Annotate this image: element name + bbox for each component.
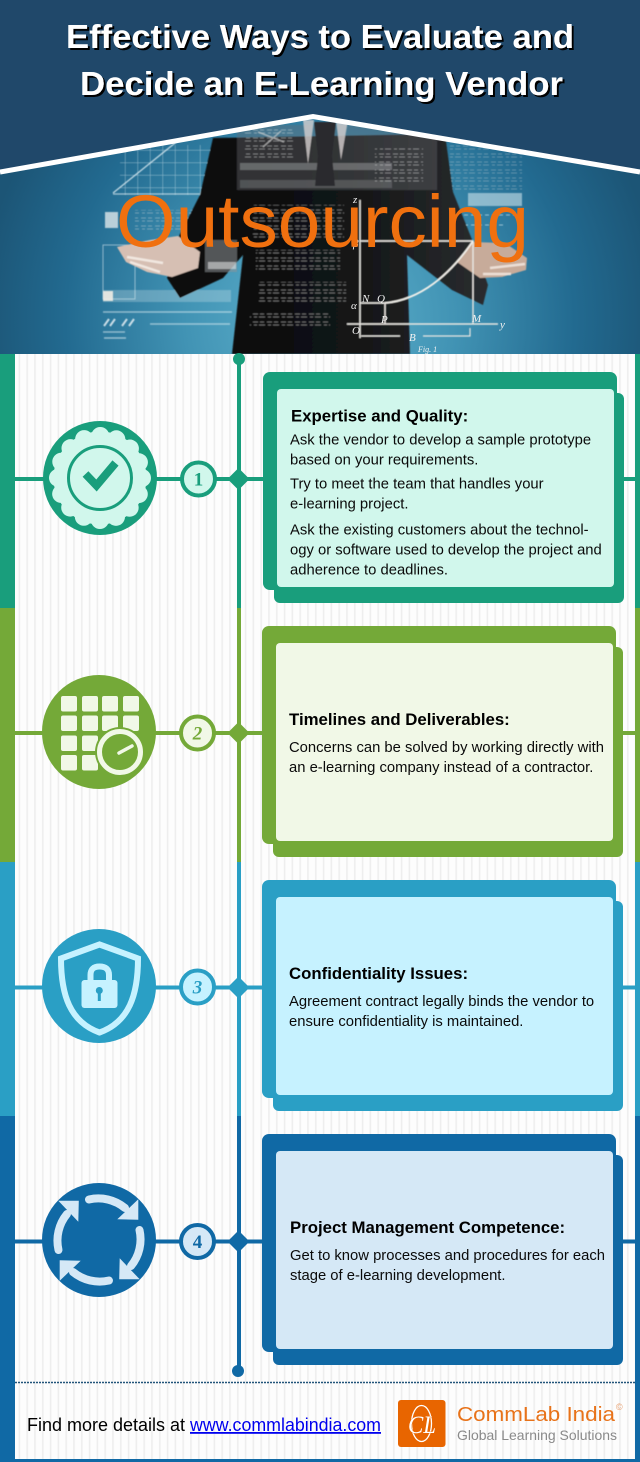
graph labels: B — [409, 332, 416, 344]
card: timelines and deliverables — [262, 626, 623, 857]
card text: ensure confidentiality is maintained. — [289, 1014, 523, 1030]
logo: CommLab India — [398, 1400, 623, 1447]
footer call to action: www.commlabindia.com — [189, 1415, 381, 1435]
roof line — [0, 116, 640, 172]
title — [66, 19, 574, 103]
graph labels: α — [351, 300, 357, 312]
graph labels: Q — [377, 293, 385, 305]
number badge 2 — [181, 716, 214, 750]
card heading: Confidentiality Issues: — [289, 964, 468, 983]
number badge 4: 4 — [193, 1232, 203, 1253]
card heading: Timelines and Deliverables: — [289, 710, 510, 729]
card text — [290, 1248, 605, 1284]
card text: Concerns can be solved by working directly with — [289, 740, 604, 756]
card text: stage of e-learning development. — [290, 1268, 506, 1284]
footer — [27, 1400, 623, 1447]
number badge 1: 1 — [194, 470, 203, 490]
photo: businessman with holographic data — [0, 116, 640, 354]
card: expertise and quality — [263, 372, 624, 603]
icon: circular arrows — [42, 1183, 156, 1297]
card text: Agreement contract legally binds the vendor to — [289, 994, 594, 1010]
logo: CommLab India: CommLab India — [457, 1404, 616, 1426]
step 1: expertise and quality — [0, 353, 640, 608]
panel: header — [0, 0, 640, 354]
graph labels: Fig. 1 — [417, 345, 437, 354]
card text: an e-learning company instead of a contractor. — [289, 760, 593, 776]
number badge 4 — [181, 1225, 214, 1258]
card text: adherence to deadlines. — [290, 562, 448, 578]
number badge 3: 3 — [192, 978, 202, 998]
card text: Try to meet the team that handles your — [290, 476, 544, 492]
card text: based on your requirements. — [290, 452, 478, 468]
graph labels: M — [471, 313, 482, 325]
logo: CommLab India: © — [616, 1402, 623, 1412]
photo headline: Outsourcing: Outsourcing — [116, 180, 529, 263]
graph labels: β — [352, 238, 359, 250]
card text: Get to know processes and procedures for each — [290, 1248, 605, 1264]
card text — [289, 994, 594, 1030]
card text: Ask the vendor to develop a sample prototype — [290, 432, 591, 448]
graph labels: z — [352, 194, 358, 206]
number badge 1 — [182, 462, 215, 496]
card text: e-learning project. — [290, 496, 408, 512]
card heading: Expertise and Quality: — [291, 406, 468, 426]
card text — [290, 432, 602, 578]
step 4: project management competence — [0, 1116, 640, 1462]
graph labels: P — [380, 314, 388, 326]
graph labels — [351, 194, 505, 354]
graph labels: O — [352, 325, 360, 337]
number badge 3 — [181, 970, 214, 1004]
step 2: timelines and deliverables — [0, 608, 640, 862]
logo: CommLab India: Global Learning Solutions — [457, 1427, 617, 1443]
title: Effective Ways to Evaluate and — [66, 19, 574, 56]
footer call to action — [27, 1415, 381, 1435]
card: project management competence — [262, 1134, 623, 1365]
icon: calendar with clock — [42, 675, 156, 789]
step 3: confidentiality issues — [0, 862, 640, 1116]
icon: quality badge with check — [43, 421, 157, 535]
card text: Ask the existing customers about the technol- — [290, 522, 589, 538]
card text — [289, 740, 604, 776]
graph labels: N — [361, 293, 370, 305]
card heading: Project Management Competence: — [290, 1218, 565, 1237]
card text: ogy or software used to develop the project and — [290, 542, 602, 558]
logo: CommLab India: CL — [408, 1412, 436, 1439]
icon: shield with padlock — [42, 929, 156, 1043]
card: confidentiality issues — [262, 880, 623, 1111]
title: Decide an E-Learning Vendor — [80, 66, 563, 103]
graph labels: y — [499, 319, 505, 331]
number badge 2: 2 — [192, 724, 203, 744]
footer call to action: Find more details at — [27, 1415, 185, 1435]
